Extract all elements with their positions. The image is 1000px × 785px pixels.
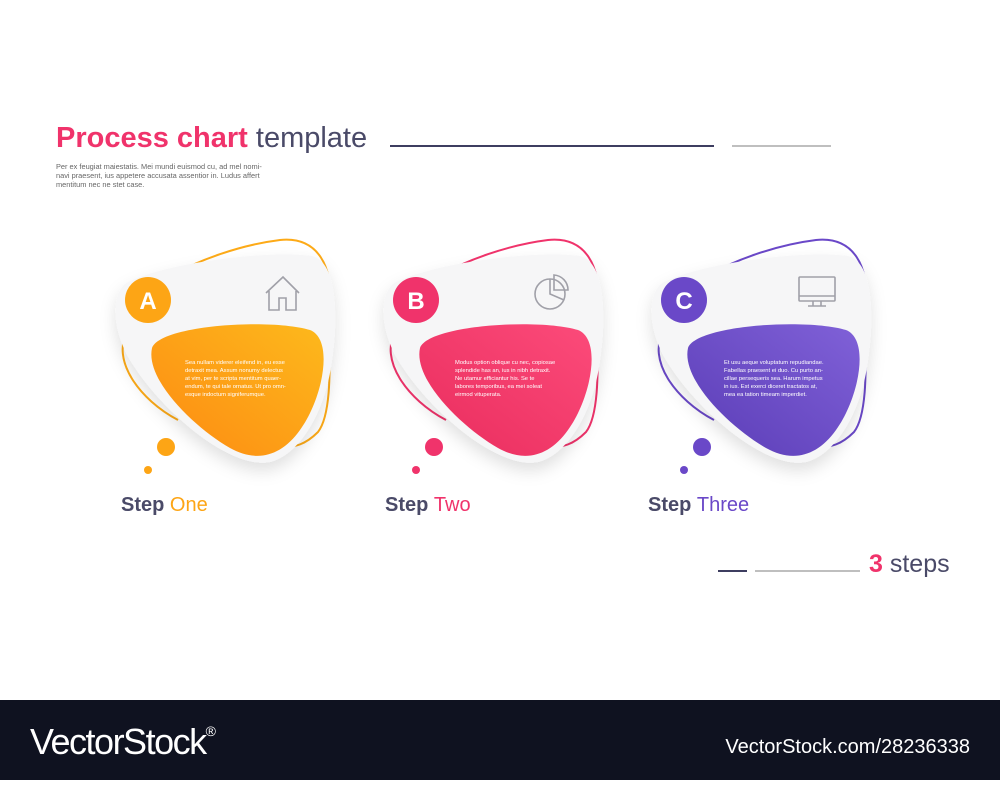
panel: step C xyxy=(648,240,871,516)
badge C: C xyxy=(675,288,693,315)
text: endum, te qui tale ornatus. Ut pro omn- xyxy=(185,384,286,390)
title: Process chart template xyxy=(56,122,367,154)
text: mea ea tation timeam imperdiet. xyxy=(724,392,807,398)
text: at vim, per te scripta mentitum quaer- xyxy=(185,376,281,382)
intro text: Per ex feugiat maiestatis. Mei mundi euismod cu, ad mel nomi- xyxy=(56,162,262,171)
intro text: navi praesent, ius appetere accusata assentior in. Ludus affert xyxy=(56,171,260,180)
intro text: mentitum nec ne stet case. xyxy=(56,180,144,189)
steps count: 3 steps xyxy=(869,550,950,578)
text: in ius. Est exerci diceret tractatos at, xyxy=(724,384,817,390)
text: splendide has an, ius in nibh detraxit. xyxy=(455,368,551,374)
footer bar xyxy=(0,700,1000,780)
text: Fabellas praesent ei duo. Cu purto an- xyxy=(724,368,823,374)
panel: step A xyxy=(115,240,335,516)
text xyxy=(455,360,555,398)
text: detraxit mea. Assum nonumy delectus xyxy=(185,368,283,374)
badge B: B xyxy=(407,288,425,315)
icon: pie chart xyxy=(535,275,568,309)
badge A xyxy=(125,277,171,323)
text: esque indoctum signiferumque. xyxy=(185,392,266,398)
text: Ne utamur efficiantur his. Se te xyxy=(455,376,534,382)
icon: house xyxy=(266,277,299,310)
icon: monitor xyxy=(799,277,835,306)
text xyxy=(724,360,824,398)
step label: Step Three xyxy=(648,494,749,516)
text: labores temporibus, ea mei soleat xyxy=(455,384,542,390)
step label: Step One xyxy=(121,494,208,516)
text: Sea nullam viderer eleifend in, eu esse xyxy=(185,360,285,366)
text: Et usu aeque voluptatum repudiandae. xyxy=(724,360,824,366)
text xyxy=(185,360,286,398)
footer bar: VectorStock.com/28236338 xyxy=(725,736,970,758)
badge C xyxy=(661,277,707,323)
footer bar: VectorStock xyxy=(30,721,206,762)
text: eirmod vituperata. xyxy=(455,392,502,398)
text: cillae persequeris sea. Harum impetus xyxy=(724,376,823,382)
text: Modus option oblique cu nec, copiosae xyxy=(455,360,555,366)
intro text xyxy=(56,162,262,189)
badge A: A xyxy=(139,288,157,315)
badge B xyxy=(393,277,439,323)
panel: step B xyxy=(383,240,603,516)
footer bar: ® xyxy=(206,723,217,739)
step label: Step Two xyxy=(385,494,471,516)
